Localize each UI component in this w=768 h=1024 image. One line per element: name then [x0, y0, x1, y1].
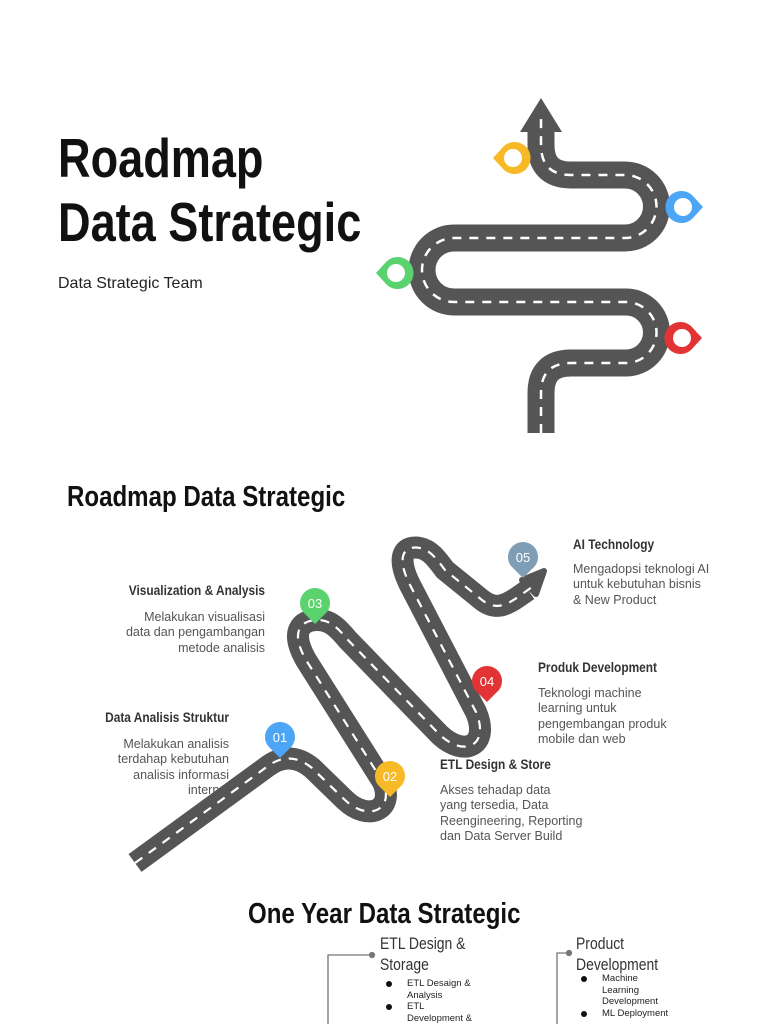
road: top winding road [422, 98, 656, 433]
title: Data Strategic [58, 191, 361, 253]
tree node: ETL Design & Storage: ETL [407, 1001, 424, 1012]
icon: green pin [376, 257, 414, 289]
tree node: ETL Design & Storage [380, 934, 472, 1024]
marker 05: 05 [516, 550, 530, 565]
tree connector: ETL [328, 952, 374, 1024]
step: Produk Development [538, 659, 667, 746]
step: Visualization & Analysis: metode analisis [178, 641, 265, 655]
marker 03 [300, 588, 330, 624]
step: ETL Design & Store: Reengineering, Reporting [440, 814, 582, 828]
marker 05 [508, 542, 538, 578]
step: Produk Development: Produk Development [538, 659, 657, 675]
step: ETL Design & Store: Akses tehadap data [440, 783, 550, 797]
step: Visualization & Analysis: Visualization & Analysis [129, 582, 265, 598]
step: Visualization & Analysis: Melakukan visualisasi [144, 610, 265, 624]
step: Visualization & Analysis: data dan pengambangan [126, 625, 265, 639]
section heading: roadmap: Roadmap Data Strategic [67, 481, 345, 513]
tree node: Product Development: Learning [602, 984, 639, 996]
tree node: ETL Design & Storage: Analysis [407, 990, 442, 1000]
tree node: ETL Design & Storage: Development & [407, 1012, 472, 1024]
section heading: one year: One Year Data Strategic [248, 898, 520, 930]
step: AI Technology: & New Product [573, 593, 656, 607]
step: Data Analisis Struktur [105, 709, 229, 797]
subtitle: Data Strategic Team [58, 275, 203, 292]
step: ETL Design & Store [440, 756, 582, 843]
marker 02: 02 [383, 769, 397, 784]
tree node: ETL Design & Storage: ETL Design & [380, 934, 465, 953]
step: Visualization & Analysis [126, 582, 265, 655]
icon: blue pin [665, 191, 703, 223]
step: Data Analisis Struktur: internal [188, 783, 229, 797]
step: Produk Development: mobile dan web [538, 732, 626, 746]
step: ETL Design & Store: yang tersedia, Data [440, 798, 548, 812]
marker 04 [472, 666, 502, 702]
step: Data Analisis Struktur: analisis informasi [133, 768, 229, 782]
tree node: Product Development: Development [602, 996, 658, 1007]
tree node: ETL Design & Storage: ETL Desaign & [407, 978, 471, 989]
tree node: ETL Design & Storage: Storage [380, 955, 429, 974]
step: Produk Development: pengembangan produk [538, 717, 667, 731]
title [58, 127, 361, 253]
marker 01 [265, 722, 295, 758]
step: AI Technology: Mengadopsi teknologi AI [573, 562, 709, 576]
tree connector: product [557, 950, 572, 1024]
road: roadmap winding road [135, 547, 544, 863]
tree node: Product Development: Product [576, 934, 624, 953]
tree node: Product Development: Machine [602, 973, 638, 984]
marker 02 [375, 761, 405, 797]
step: AI Technology: AI Technology [573, 536, 654, 552]
tree node: Product Development: Development [576, 955, 658, 974]
step: AI Technology: untuk kebutuhan bisnis [573, 577, 701, 591]
marker 03: 03 [308, 596, 322, 611]
step: AI Technology [573, 536, 709, 607]
icon: red pin [664, 322, 702, 354]
icon: yellow pin [493, 142, 531, 174]
step: ETL Design & Store: dan Data Server Build [440, 829, 562, 843]
step: Data Analisis Struktur: Melakukan analisis [123, 737, 229, 751]
marker 04: 04 [480, 674, 494, 689]
step: Produk Development: Teknologi machine [538, 686, 642, 700]
step: ETL Design & Store: ETL Design & Store [440, 756, 551, 772]
marker 01: 01 [273, 730, 287, 745]
tree node: Product Development: ML Deployment [602, 1008, 668, 1018]
step: Data Analisis Struktur: Data Analisis Struktur [105, 709, 229, 725]
title: Roadmap [58, 127, 263, 189]
step: Data Analisis Struktur: terdahap kebutuhan [118, 752, 229, 766]
step: Produk Development: learning untuk [538, 701, 617, 715]
tree node: Product Development [576, 934, 668, 1018]
